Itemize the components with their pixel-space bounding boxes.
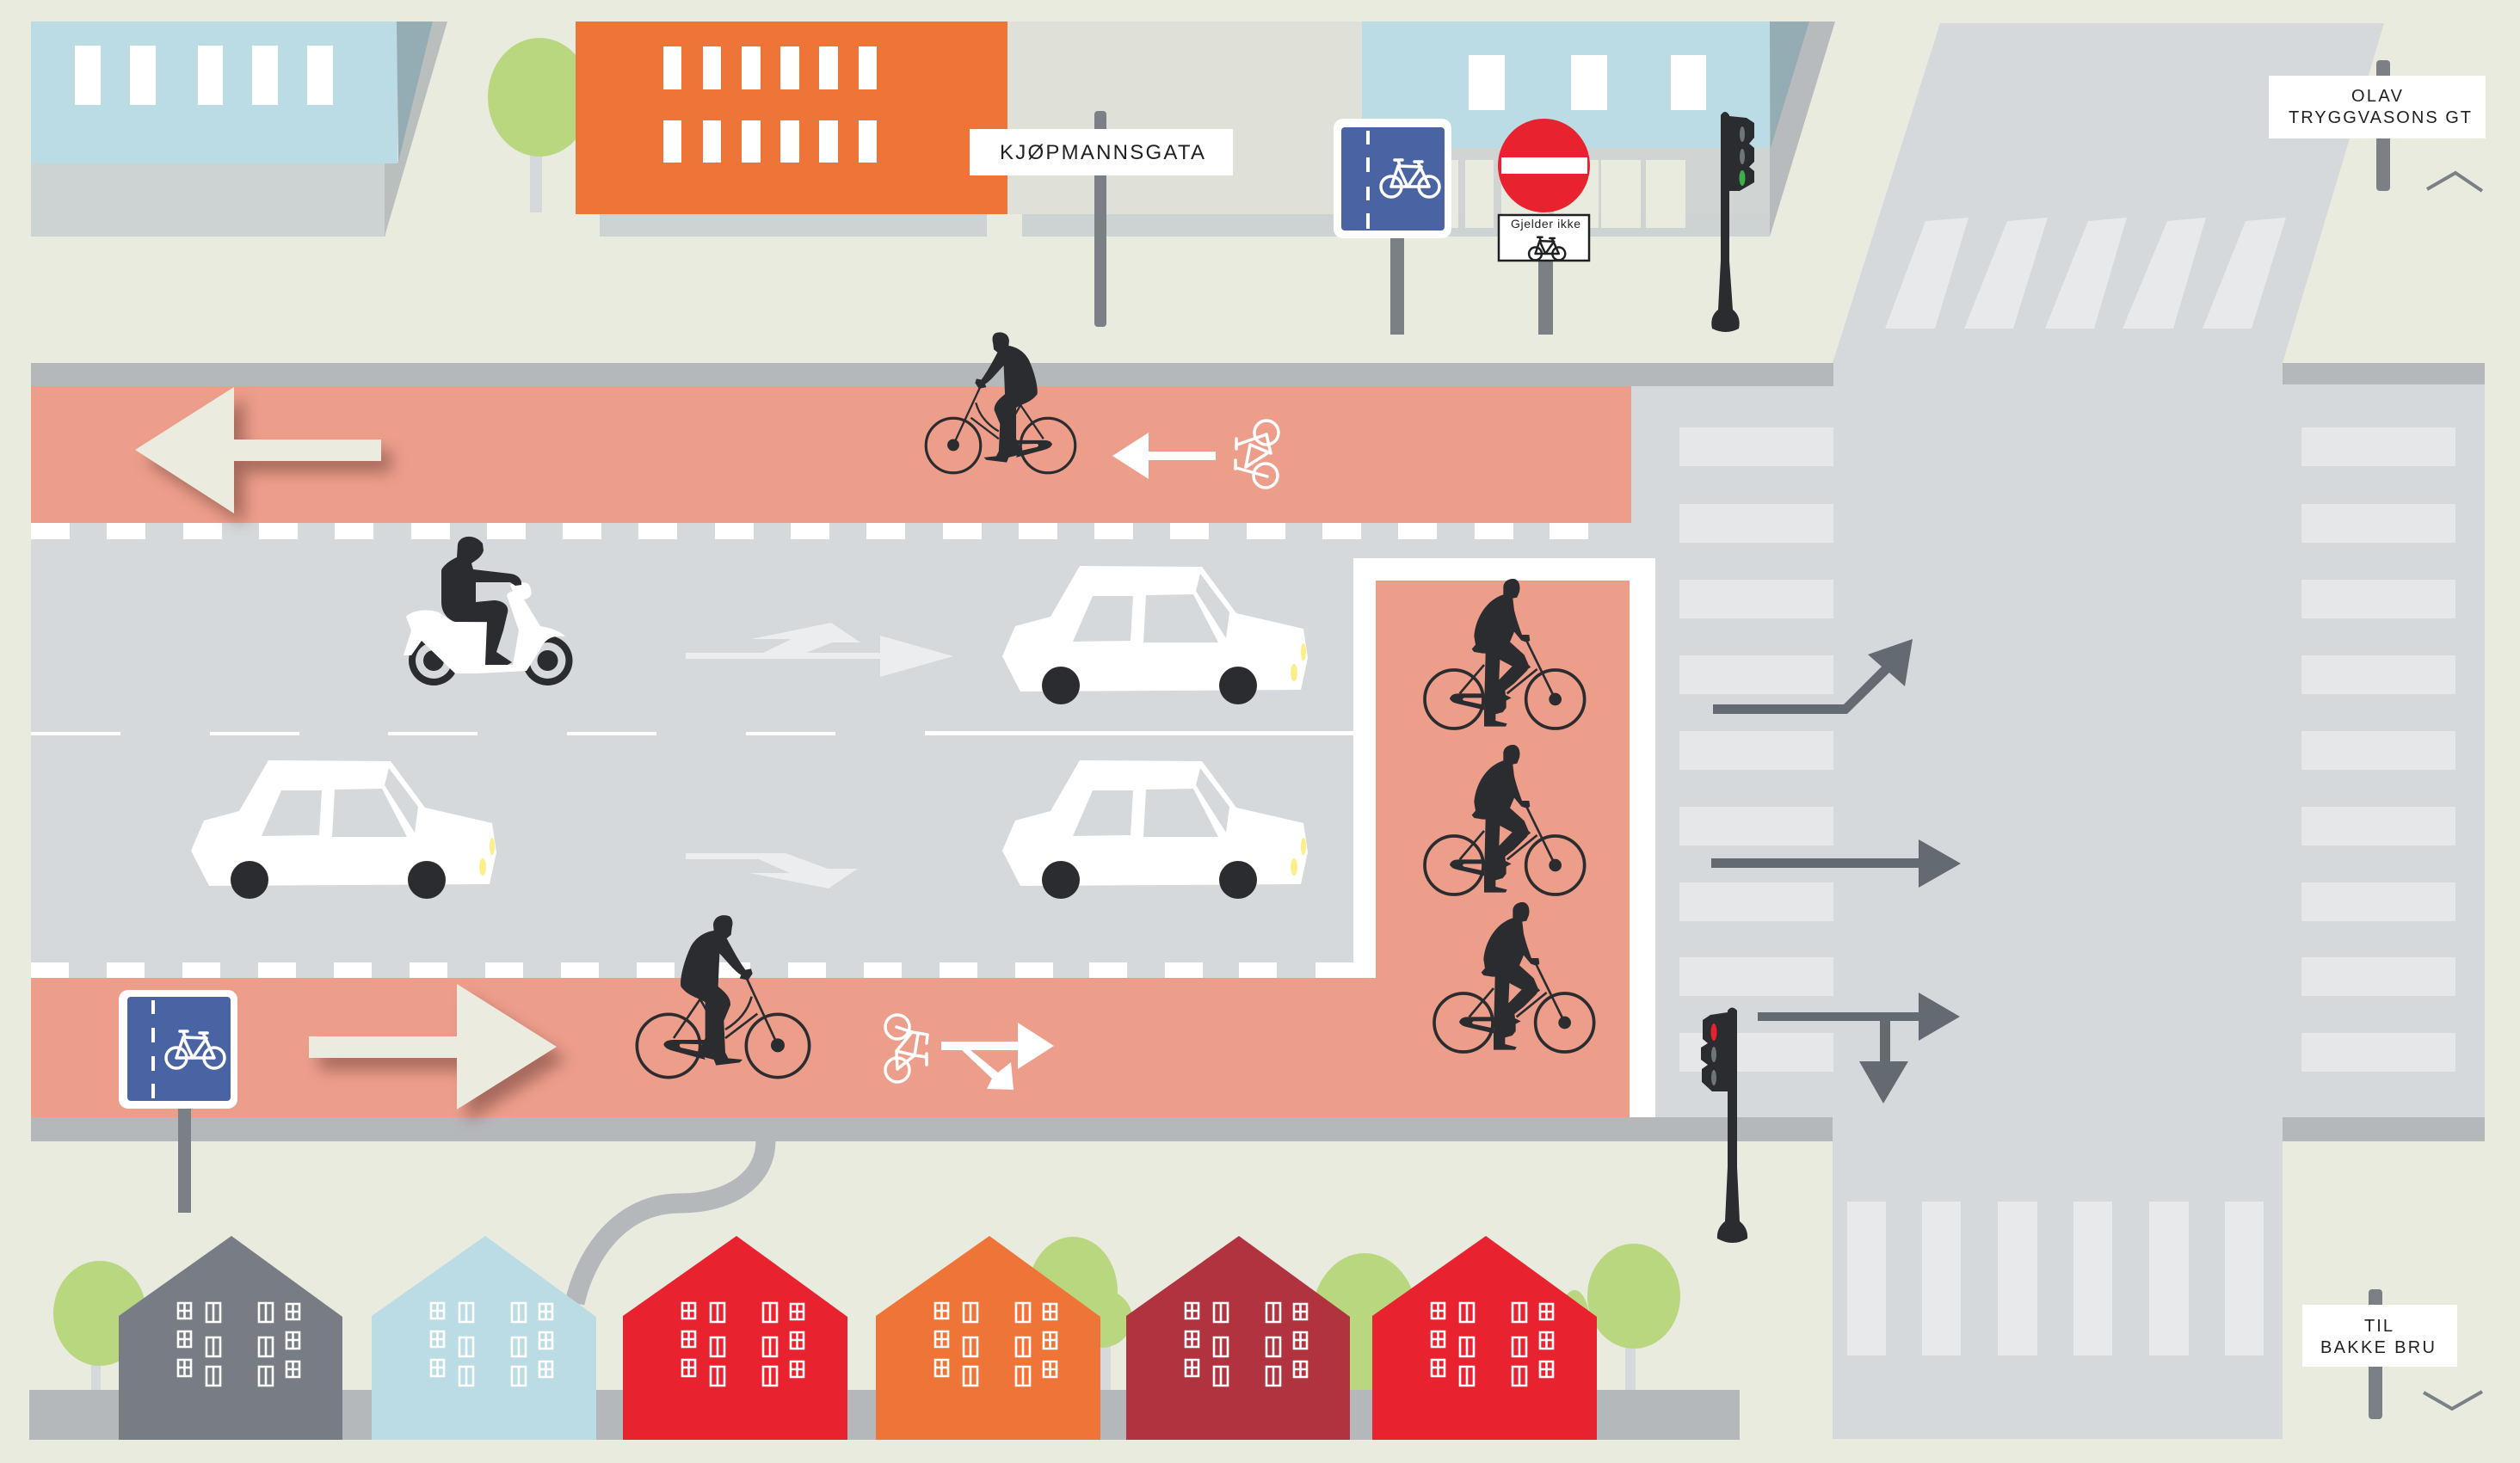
- cyclist: stop box 1: [1425, 579, 1585, 728]
- cyclist: stop box 3: [1434, 902, 1594, 1052]
- lane markings: top dashed line: [31, 523, 1588, 539]
- scooter with rider: [404, 537, 573, 685]
- trees: bottom row: [53, 1237, 1680, 1390]
- lane markings: bottom dashed line: [31, 962, 1353, 978]
- bottom cycle lane and advance stop box: [31, 558, 1655, 1117]
- direction arrow: straight: [1711, 839, 1961, 888]
- direction arrow: right turn diagonal: [1713, 639, 1913, 714]
- car: lower lane right: [1002, 760, 1308, 899]
- cycle marking: bottom lane: [885, 1015, 1054, 1090]
- house: dark red: [1126, 1236, 1350, 1440]
- cross street north part over road: [1833, 361, 2283, 396]
- path: side street: [575, 1140, 766, 1303]
- sign: no entry with exception plate: Gjelder ikke: [1511, 217, 1580, 231]
- street sign: Kjøpmannsgata: [970, 111, 1233, 327]
- house: red right: [1372, 1236, 1597, 1440]
- crosswalk: north: [1885, 218, 2286, 329]
- icon: chevron up: [2427, 173, 2482, 191]
- cyclist: bottom lane: [637, 915, 810, 1078]
- sign: cycle lane (bottom): [119, 990, 237, 1213]
- house: light blue: [372, 1236, 596, 1440]
- arrow: large cycle lane right: [309, 984, 567, 1122]
- street sign: Olav Tryggvasons gt: OLAV: [2351, 87, 2403, 106]
- car: upper lane: [1002, 566, 1308, 704]
- kerb: bottom left: [31, 1117, 1833, 1141]
- crosswalk: right of junction: [2301, 427, 2455, 1072]
- road arrow: upper lane: [686, 623, 953, 677]
- top cycle lane: [31, 386, 1631, 523]
- traffic light: bottom: [1701, 1008, 1747, 1243]
- lane markings: centre line: [31, 731, 1353, 735]
- sign: cycle lane (top): [1334, 119, 1451, 335]
- street sign: Olav Tryggvasons gt: [2269, 60, 2486, 191]
- arrow: large cycle lane left: [135, 387, 391, 525]
- building: light blue left: [31, 22, 447, 237]
- cross street: [1833, 23, 2384, 1439]
- icon: chevron down: [2424, 1392, 2482, 1409]
- kerb: top right: [2283, 363, 2485, 384]
- house: red: [623, 1236, 847, 1440]
- tree: top: [488, 38, 591, 212]
- house: grey: [119, 1236, 342, 1440]
- building: beige middle: [600, 22, 1770, 237]
- traffic light: top: [1711, 112, 1754, 332]
- road arrow: lower lane: [686, 853, 858, 888]
- cycle marking: top lane: [1112, 421, 1278, 488]
- kerb: top left: [31, 363, 1833, 386]
- street sign: Til Bakke bru: TIL: [2364, 1317, 2393, 1336]
- street sign: Kjøpmannsgata: KJØPMANNSGATA: [1000, 141, 1205, 164]
- crosswalk: left of junction: [1679, 427, 1833, 1072]
- street sign: Olav Tryggvasons gt: TRYGGVASONS GT: [2289, 108, 2471, 127]
- building: orange: [576, 22, 1007, 214]
- house: orange: [876, 1236, 1100, 1440]
- building: light blue right: [1362, 22, 1835, 237]
- street sign: Til Bakke bru: BAKKE BRU: [2320, 1338, 2435, 1357]
- car: lower lane left: [191, 760, 496, 899]
- cyclist: top lane: [926, 332, 1075, 473]
- street sign: Til Bakke bru: [2302, 1289, 2457, 1419]
- cyclist: stop box 2: [1425, 745, 1585, 894]
- kerb: bottom right: [2283, 1117, 2485, 1141]
- direction arrow: straight or down: [1758, 993, 1960, 1103]
- crosswalk: south: [1847, 1202, 2264, 1355]
- main road: [31, 384, 2485, 1117]
- sign: no entry with exception plate: [1498, 119, 1590, 335]
- street base behind houses: [29, 1390, 1740, 1440]
